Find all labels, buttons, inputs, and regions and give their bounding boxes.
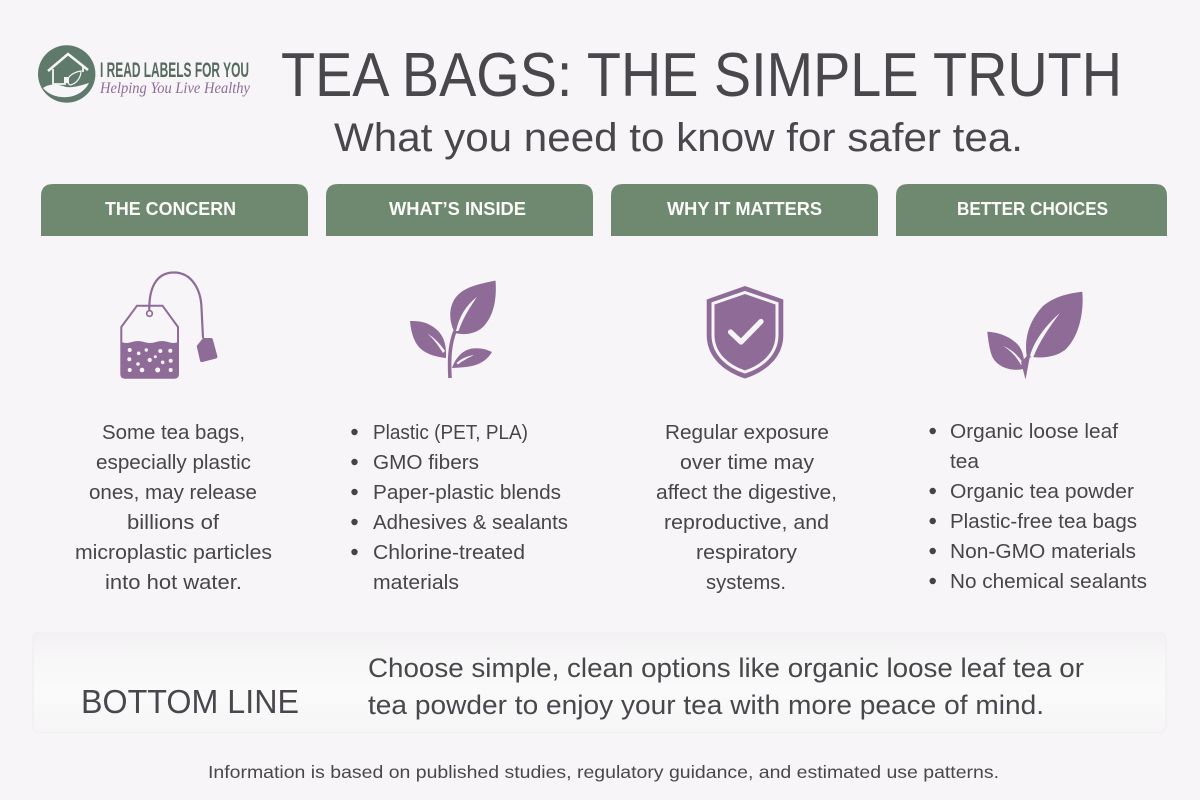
list: better choices: tea — [950, 450, 980, 473]
text: the concern: into hot water. — [105, 571, 242, 594]
heading: what's inside — [326, 184, 593, 236]
icon: tea bag — [121, 272, 217, 378]
text: why it matters: respiratory — [696, 541, 798, 564]
panel: the concern — [41, 184, 308, 594]
panel: what's inside — [326, 184, 593, 594]
heading: better choices — [896, 184, 1167, 236]
icon: tea plant — [410, 280, 496, 378]
title: TEA BAGS: THE SIMPLE TRUTH — [281, 40, 1122, 110]
text: why it matters: systems. — [706, 571, 786, 594]
callout: bottom line: BOTTOM LINE — [81, 683, 299, 720]
list: what's inside: Chlorine-treated — [373, 541, 525, 564]
list: what's inside: Paper-plastic blends — [373, 481, 561, 504]
text: the concern: especially plastic — [96, 451, 251, 474]
list: what's inside: Plastic (PET, PLA) — [373, 421, 528, 444]
list: what's inside — [351, 421, 568, 594]
list: what's inside: Adhesives & sealants — [373, 511, 568, 534]
panel: why it matters — [611, 184, 878, 594]
text: the concern: Some tea bags, — [102, 421, 245, 444]
list: better choices — [930, 420, 1147, 593]
list: better choices: No chemical sealants — [950, 570, 1147, 593]
text: the concern: ones, may release — [89, 481, 257, 504]
list: what's inside: GMO fibers — [373, 451, 479, 474]
text: the concern: billions of — [127, 511, 219, 534]
list: better choices: Organic loose leaf — [950, 420, 1118, 443]
logo — [38, 45, 251, 103]
text: why it matters: over time may — [680, 451, 815, 474]
heading: the concern: THE CONCERN — [105, 199, 236, 219]
list: better choices: Non-GMO materials — [950, 540, 1136, 563]
text: the concern: microplastic particles — [75, 541, 272, 564]
list: better choices: Plastic-free tea bags — [950, 510, 1137, 533]
heading: the concern — [41, 184, 308, 236]
icon: leaves — [987, 292, 1083, 380]
callout: bottom line: Choose simple, clean options like organic loose leaf tea or — [368, 653, 1084, 683]
text: why it matters — [656, 421, 837, 594]
footer note: Information is based on published studies, regulatory guidance, and estimated use patterns. — [208, 762, 999, 782]
icon: shield with check — [707, 286, 783, 378]
heading: what's inside: WHAT’S INSIDE — [389, 199, 526, 219]
text: the concern — [75, 421, 272, 594]
panel: better choices — [896, 184, 1167, 593]
callout: bottom line — [33, 632, 1166, 732]
text: why it matters: Regular exposure — [665, 421, 829, 444]
list: better choices: Organic tea powder — [950, 480, 1134, 503]
subtitle: What you need to know for safer tea. — [334, 116, 1023, 160]
logo: I READ LABELS FOR YOU — [100, 59, 249, 82]
heading: better choices: BETTER CHOICES — [957, 199, 1108, 219]
text: why it matters: reproductive, and — [664, 511, 829, 534]
logo: Helping You Live Healthy — [99, 80, 251, 97]
heading: why it matters — [611, 184, 878, 236]
callout: bottom line: tea powder to enjoy your tea with more peace of mind. — [368, 690, 1044, 720]
heading: why it matters: WHY IT MATTERS — [667, 199, 822, 219]
text: why it matters: affect the digestive, — [656, 481, 837, 504]
list: what's inside: materials — [373, 571, 459, 594]
